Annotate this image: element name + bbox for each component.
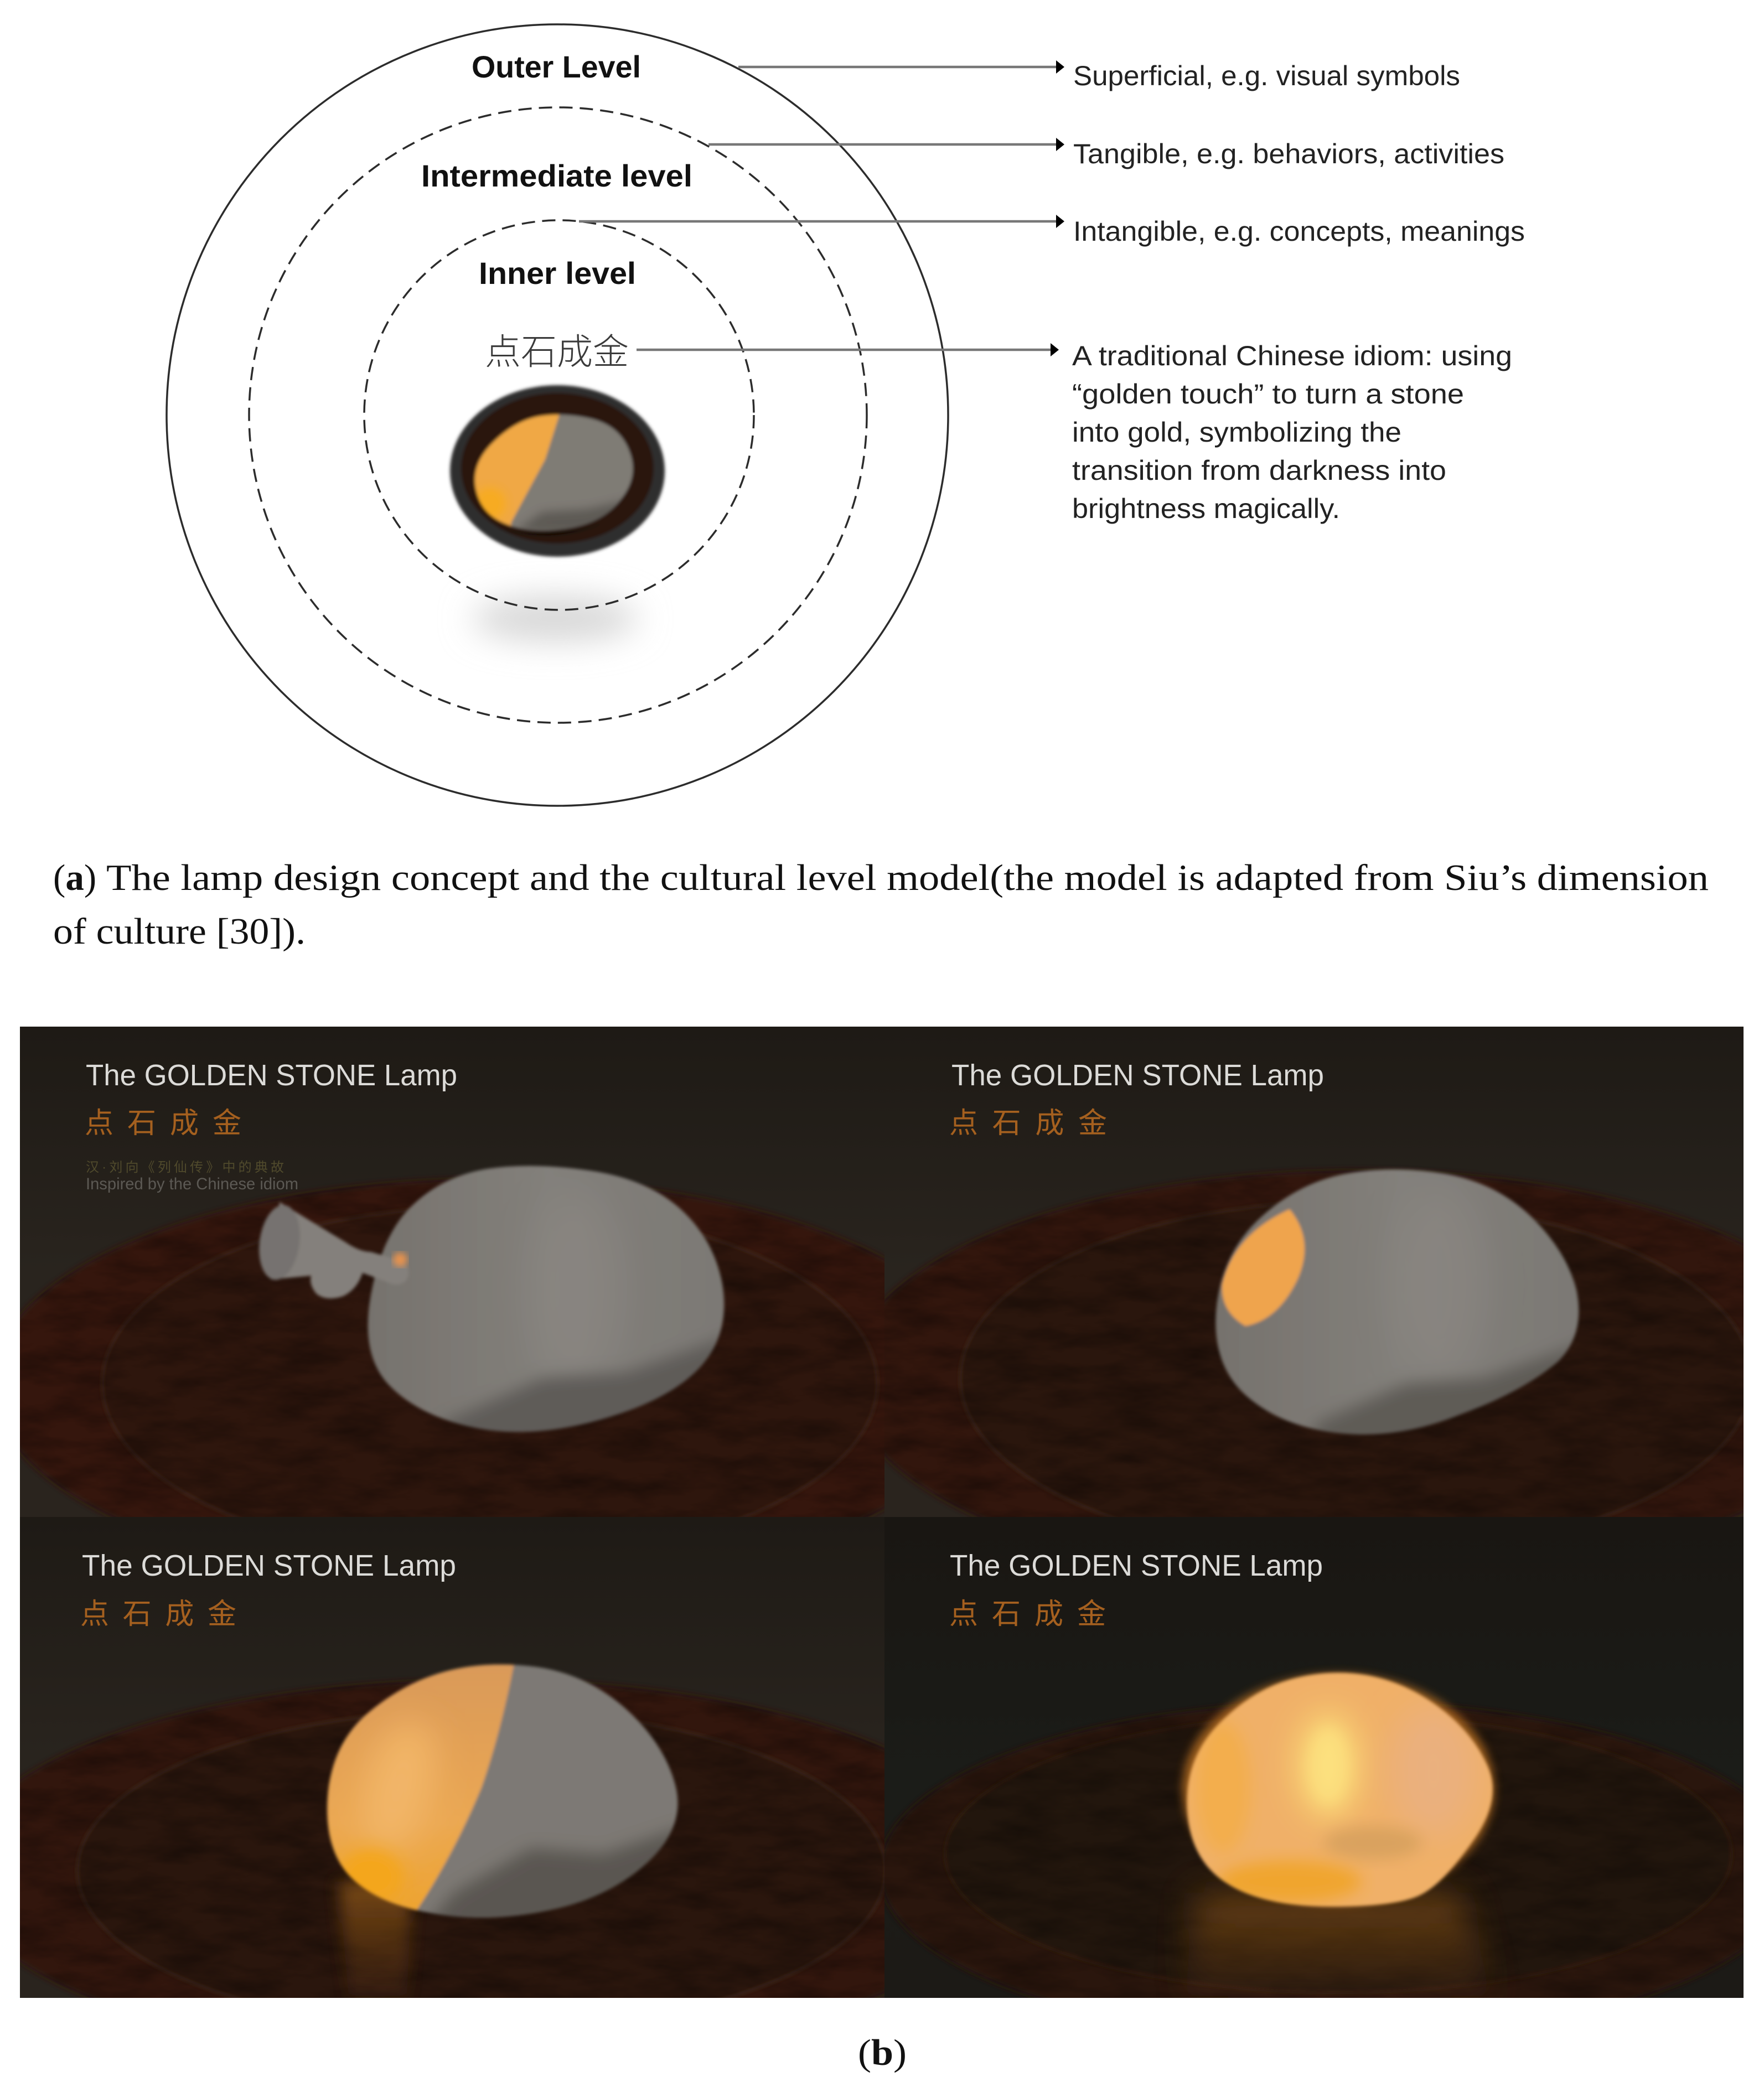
arrow: inner level — [579, 215, 1064, 228]
pointing hand — [255, 1202, 408, 1298]
caption a: (a) — [53, 857, 96, 898]
wooden tray — [20, 1178, 884, 1517]
lamp icon — [450, 385, 665, 557]
floor reflection — [339, 1882, 412, 1998]
label: intangible: Intangible, e.g. concepts, meanings — [1073, 216, 1525, 247]
chinese subtitle: 点 石 成 金 — [85, 1107, 241, 1140]
panel a: cultural level model — [53, 24, 1709, 952]
intermediate level circle — [249, 107, 867, 723]
floor reflection — [1184, 1893, 1494, 1998]
idiom description: into gold, symbolizing the — [1072, 417, 1401, 448]
idiom description — [1072, 340, 1512, 524]
outer level circle — [167, 24, 948, 806]
grey stone — [366, 1164, 726, 1434]
arrow: idiom — [637, 343, 1059, 356]
panel b4: full glow — [879, 1517, 1764, 2039]
glow halo — [1182, 1674, 1494, 1904]
heading: inner level: Inner level — [479, 256, 636, 291]
wooden tray — [0, 1677, 1007, 2062]
idiom in chinese: 点石成金 — [485, 332, 629, 372]
title: The GOLDEN STONE Lamp — [950, 1549, 1323, 1582]
caption a — [53, 857, 1709, 952]
wooden tray — [879, 1699, 1764, 2039]
title: The GOLDEN STONE Lamp — [951, 1059, 1324, 1092]
light spot — [393, 1252, 407, 1267]
chinese subtitle: 点 石 成 金 — [80, 1598, 236, 1630]
soft shadow under lamp — [472, 597, 638, 641]
arrow: outer level — [738, 60, 1064, 74]
heading: outer level: Outer Level — [472, 49, 641, 84]
inspiration note: Inspired by the Chinese idiom — [86, 1175, 298, 1193]
title: The GOLDEN STONE Lamp — [86, 1059, 457, 1092]
title: The GOLDEN STONE Lamp — [82, 1549, 456, 1582]
fully lit stone — [1179, 1666, 1506, 1909]
label: tangible: Tangible, e.g. behaviors, activities — [1073, 138, 1504, 169]
arrow: intermediate level — [708, 138, 1064, 151]
wooden tray — [847, 1162, 1764, 1586]
stone with small lit area — [1207, 1157, 1594, 1450]
panel b2: small glow — [847, 1027, 1764, 1586]
inner level circle — [364, 220, 754, 610]
idiom description: “golden touch” to turn a stone — [1072, 379, 1464, 410]
heading: intermediate level: Intermediate level — [421, 158, 692, 193]
chinese subtitle: 点 石 成 金 — [949, 1598, 1106, 1630]
idiom description: brightness magically. — [1072, 493, 1340, 524]
label: superficial: Superficial, e.g. visual symbols — [1073, 60, 1460, 91]
caption a: The lamp design concept and the cultural level model(the model is adapted from Siu’s dimension — [106, 857, 1709, 898]
idiom description: A traditional Chinese idiom: using — [1072, 340, 1512, 371]
idiom description: transition from darkness into — [1072, 455, 1446, 486]
panel b1: stone with touching hand — [20, 1027, 884, 1517]
chinese subtitle: 点 石 成 金 — [949, 1107, 1107, 1140]
half lit stone — [318, 1660, 692, 1931]
caption a: of culture [30]). — [53, 911, 306, 952]
panel b3: half glow — [0, 1517, 1007, 2062]
caption b: (b) — [858, 2032, 907, 2073]
source note chinese: 汉·刘向《列仙传》中的典故 — [86, 1160, 284, 1175]
